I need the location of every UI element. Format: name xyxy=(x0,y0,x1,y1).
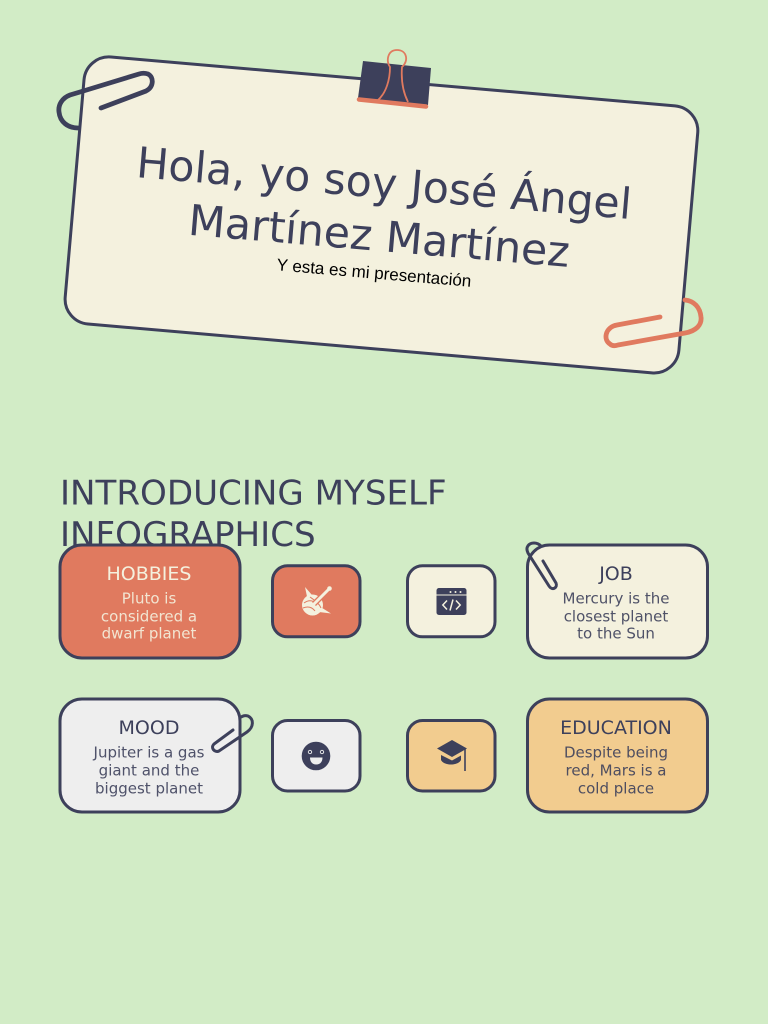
title: Martínez Martínez xyxy=(186,196,572,278)
hobbies text: dwarf planet xyxy=(102,624,196,642)
icon: navy paperclip xyxy=(59,73,152,128)
education heading: EDUCATION xyxy=(560,717,672,739)
panel: mood xyxy=(60,699,240,812)
heading: INTRODUCING MYSELF xyxy=(60,474,447,514)
hobbies heading: HOBBIES xyxy=(107,563,191,585)
mood text: giant and the xyxy=(99,762,199,780)
panel: hobbies xyxy=(60,545,240,658)
job heading: JOB xyxy=(598,563,633,585)
subtitle: Y esta es mi presentación xyxy=(276,255,472,291)
panel: education xyxy=(528,699,708,812)
icon tile: hobbies xyxy=(272,566,360,637)
education text: red, Mars is a xyxy=(566,762,666,780)
education text: cold place xyxy=(578,780,654,798)
icon: mood paperclip xyxy=(213,716,252,751)
icon tile: education xyxy=(408,720,495,791)
panel: job xyxy=(528,545,708,658)
education text: Despite being xyxy=(564,744,668,762)
icon: binder clip xyxy=(358,50,431,106)
icon tile: mood xyxy=(272,720,360,791)
job text: closest planet xyxy=(564,608,668,626)
heading: INFOGRAPHICS xyxy=(60,515,316,555)
job text: Mercury is the xyxy=(563,590,669,608)
job text: to the Sun xyxy=(577,624,655,642)
mood text: Jupiter is a gas xyxy=(93,744,205,762)
hobbies text: considered a xyxy=(101,608,197,626)
icon: graduation cap xyxy=(437,740,467,771)
title: Hola, yo soy José Ángel xyxy=(135,137,634,230)
icon: job paperclip xyxy=(527,543,556,589)
mood heading: MOOD xyxy=(119,717,179,739)
icon: orange paperclip xyxy=(606,300,701,346)
icon: yarn and needles xyxy=(302,586,332,616)
hobbies text: Pluto is xyxy=(122,590,176,608)
icon tile: job xyxy=(408,566,495,637)
icon: smiley xyxy=(302,742,330,770)
mood text: biggest planet xyxy=(95,780,203,798)
panel: title card xyxy=(63,55,700,375)
icon: code window xyxy=(436,588,466,615)
